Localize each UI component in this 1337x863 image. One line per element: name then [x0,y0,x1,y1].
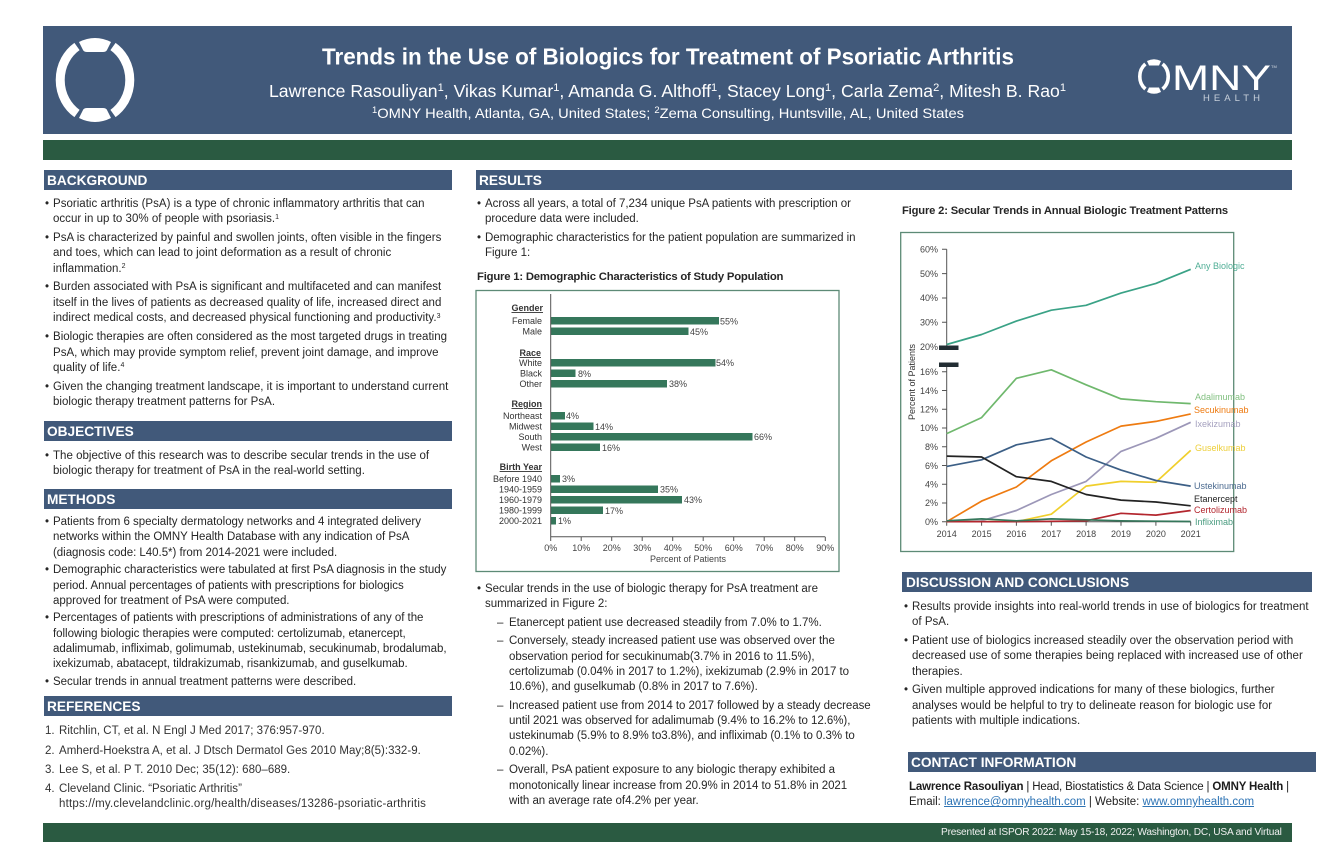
text: background bullets: quality of life.4 [53,362,124,374]
bar chart: demographics: 2000-2021 [499,516,542,526]
authors: , Vikas Kumar [444,81,553,101]
bar chart: demographics: Midwest [509,422,542,432]
bar chart: demographics: 1980-1999 [499,506,542,516]
text: methods bullets: approved for treatment of PsA were computed. [53,595,289,607]
line chart: biologic trends [900,232,1249,552]
line chart: biologic trends: 4% [925,480,938,490]
affiliations: OMNY Health, Atlanta, GA, United States; [377,105,654,121]
bar chart: demographics: 90% [816,543,834,553]
line chart: biologic trends: 2020 [1146,529,1166,539]
text: discussion bullets: patients with multiple indications. [912,715,1080,727]
text: methods bullets: • [45,516,49,528]
line chart: biologic trends: 50% [920,269,938,279]
bar chart: demographics: 45% [690,327,708,337]
text: references list: 1. [45,725,55,737]
bar chart: demographics: 1940-1959 [499,484,542,494]
text: secular trends summary [477,583,871,807]
text: contact details [909,781,1289,808]
line chart: biologic trends: 8% [925,442,938,452]
bar chart: demographics: 8% [578,369,591,379]
bar chart: demographics: 4% [566,411,579,421]
header banner [43,26,1292,134]
text: references list: https://my.clevelandclinic.org/health/diseases/13286-psoriatic-arthritis [59,798,426,810]
bar chart: demographics: 30% [633,543,651,553]
authors [269,81,1066,101]
heading: results: RESULTS [479,173,542,188]
authors: , Stacey Long [717,81,825,101]
bar chart: demographics: Female [512,316,542,326]
affiliations: 1 [372,105,377,115]
text: objectives [45,450,430,477]
heading: discussion and conclusions: DISCUSSION AND CONCLUSIONS [906,575,1129,590]
bar chart: demographics: 20% [603,543,621,553]
text: secular trends summary: observation period for secukinumab(3.7% in 2016 to 11.5%), [509,651,815,663]
text: references list: Lee S, et al. P T. 2010 Dec; 35(12): 680–689. [59,764,290,776]
text: methods bullets: ixekizumab, abatacept, tildrakizumab, risankizumab, and guselkumab. [53,658,408,670]
line chart: biologic trends: Secukinumab [1194,405,1249,415]
heading: contact information: CONTACT INFORMATION [911,755,1076,770]
text: background bullets: and toes, which can lead to joint deformation as a result of chronic [53,247,391,259]
text: results intro: • [477,198,481,210]
footer band [43,823,1292,842]
heading: methods [44,489,452,509]
line chart: biologic trends: Certolizumab [1194,505,1247,515]
text: discussion bullets: analyses would be helpful to try to delineate reason for biologic use for [912,700,1272,712]
text: discussion bullets: of PsA. [912,616,949,628]
text: secular trends summary: Conversely, steady increased patient use was observed over the [509,635,835,647]
text: results intro: Figure 1: [485,247,530,259]
text: secular trends summary: • [477,583,481,595]
line chart: biologic trends: 2019 [1111,529,1131,539]
authors: Lawrence Rasouliyan [269,81,436,101]
heading: methods: METHODS [47,492,115,507]
text: references list: Amherd-Hoekstra A, et al. J Dtsch Dermatol Ges 2010 May;8(5):332-9. [59,745,421,757]
heading: background [44,170,452,190]
bar chart: demographics: South [518,432,542,442]
icon: OMNY Health wordmark: HEALTH [1203,93,1260,104]
authors: 1 [1060,82,1066,94]
line chart: biologic trends: 2021 [1181,529,1201,539]
heading: references [44,696,452,716]
text: discussion bullets: Patient use of biologics increased steadily over the observation period with [912,635,1293,647]
line chart: biologic trends: Infliximab [1195,517,1233,527]
heading: discussion and conclusions [902,572,1312,592]
heading: results [476,170,1292,190]
text: methods bullets: Patients from 6 specialty dermatology networks and 4 integrated delivery [53,516,421,528]
affiliations: Zema Consulting, Huntsville, AL, United States [660,105,964,121]
icon: OMNY Health wordmark: TM [1271,64,1277,69]
text: background bullets: indirect medical costs, and decreased physical functioning and productivity.3 [53,312,440,324]
authors: , Mitesh B. Rao [939,81,1060,101]
text: secular trends summary: Etanercept patient use decreased steadily from 7.0% to 1.7%. [509,617,822,629]
text: background bullets [45,198,448,408]
text: methods bullets: • [45,676,49,688]
text: background bullets: Given the changing treatment landscape, it is important to understand current [53,381,448,393]
bar chart: demographics: 38% [669,379,687,389]
icon: OMNY Health wordmark [1138,59,1277,104]
heading: background: BACKGROUND [47,173,147,188]
text: secular trends summary: Overall, PsA patient exposure to any biologic therapy exhibited a [509,764,835,776]
heading: objectives: OBJECTIVES [47,424,134,439]
text: secular trends summary: Secular trends in the use of biologic therapy for PsA treatment are [485,583,818,595]
bar chart: demographics: Percent of Patients [650,554,727,564]
bar chart: demographics: 80% [786,543,804,553]
text: secular trends summary: – [497,700,503,712]
text: background bullets: • [45,232,49,244]
text: secular trends summary: – [497,764,503,776]
bar chart: demographics: Birth Year [500,462,542,472]
text: secular trends summary: 0.02%). [509,746,548,758]
line chart: biologic trends: 30% [920,318,938,328]
text: background bullets: biologic therapy treatment patterns for PsA. [53,396,275,408]
bar chart: demographics: 66% [754,432,772,442]
text: methods bullets: Secular trends in annual treatment patterns were described. [53,676,356,688]
text: secular trends summary: – [497,635,503,647]
text: secular trends summary: summarized in Figure 2: [485,598,607,610]
text: objectives: The objective of this research was to describe secular trends in the use of [53,450,429,462]
line chart: biologic trends: 6% [925,461,938,471]
line chart: biologic trends: Ustekinumab [1194,481,1247,491]
text: methods bullets: period. Annual percentages of patients with prescriptions for biologics [53,580,404,592]
text: references list: 3. [45,764,55,776]
text: discussion bullets: decreased use of some therapies being replaced with increased use of other [912,650,1303,662]
line chart: biologic trends: 12% [920,404,938,414]
text: results intro [477,198,856,259]
text: contact details: Lawrence Rasouliyan | Head, Biostatistics & Data Science | OMNY Health | [909,781,1289,793]
text: background bullets: itself in the lives of patients as decreased quality of life, increased direct and [53,297,441,309]
line chart: biologic trends: Any Biologic [1195,261,1245,271]
text: discussion bullets [904,601,1309,727]
bar chart: demographics: 35% [660,484,678,494]
icon: OMNY ring logo [56,38,134,122]
authors: , Carla Zema [831,81,933,101]
text: methods bullets: • [45,612,49,624]
text: references list: Ritchlin, CT, et al. N Engl J Med 2017; 376:957-970. [59,725,325,737]
line chart: biologic trends: 2016 [1006,529,1026,539]
bar chart: demographics: Black [520,368,542,378]
bar chart: demographics: Race [519,348,541,358]
line chart: biologic trends: 2014 [937,529,957,539]
line chart: biologic trends: 20% [920,342,938,352]
text: methods bullets [45,516,447,688]
text: background bullets: • [45,198,49,210]
bar chart: demographics: 1960-1979 [499,495,542,505]
bar chart: demographics: White [519,358,542,368]
bar chart: demographics: 54% [716,358,734,368]
line chart: biologic trends: Guselkumab [1195,443,1246,453]
text: secular trends summary: until 2021 was observed for adalimumab (9.4% to 16.2% to 12.6%), [509,715,850,727]
text: methods bullets: adalimumab, infliximab, golimumab, ustekinumab, secukinumab, brodalumab, [53,643,447,655]
bar chart: demographics: Before 1940 [493,474,542,484]
line chart: biologic trends: 14% [920,386,938,396]
bar chart: demographics: 10% [572,543,590,553]
text: secular trends summary: – [497,617,503,629]
text: references list: 2. [45,745,55,757]
heading: references: REFERENCES [47,699,141,714]
bar chart: demographics [475,290,840,572]
text: secular trends summary: certolizumab (0.04% in 2017 to 1.2%), ixekizumab (2.9% in 2017 to [509,666,849,678]
line chart: biologic trends: 0% [925,517,938,527]
bar chart: demographics: 3% [562,474,575,484]
line chart: biologic trends: 2017 [1041,529,1061,539]
heading: contact information [908,752,1316,772]
line chart: biologic trends: Etanercept [1194,494,1238,504]
line chart: biologic trends: 2% [925,498,938,508]
text: discussion bullets: Results provide insights into real-world trends in use of biologics for treatment [912,601,1309,613]
text: background bullets: PsA is characterized by painful and swollen joints, often visible in the fingers [53,232,441,244]
line chart: biologic trends: Percent of Patients [907,343,917,420]
text: methods bullets: Percentages of patients with prescriptions of administrations of any of the [53,612,423,624]
bar chart: demographics: 1% [558,516,571,526]
text: background bullets: inflammation.2 [53,263,126,275]
line chart: biologic trends: 2018 [1076,529,1096,539]
text: secular trends summary: Increased patient use from 2014 to 2017 followed by a steady decrease [509,700,871,712]
bar chart: demographics: West [522,442,542,452]
text: references list [45,725,426,810]
affiliations [372,105,964,121]
text: objectives: • [45,450,49,462]
text: secular trends summary: with an average rate of4.2% per year. [509,795,699,807]
figure 2 title: Figure 2: Secular Trends in Annual Biologic Treatment Patterns [902,204,1228,216]
bar chart: demographics: 60% [725,543,743,553]
text: discussion bullets: • [904,635,908,647]
text: methods bullets: (diagnosis code: L40.5*) from 2014-2021 were included. [53,547,337,559]
text: background bullets: • [45,381,49,393]
text: background bullets: PsA, which may provide symptom relief, prevent joint damage, and improve [53,347,439,359]
text: results intro: Across all years, a total of 7,234 unique PsA patients with prescription or [485,198,851,210]
authors: 2 [933,82,939,94]
line chart: biologic trends: Adalimumab [1195,392,1245,402]
text: secular trends summary: monotonically linear increase from 20.9% in 2014 to 51.8% in 2021 [509,780,847,792]
text: results intro: procedure data were included. [485,213,639,225]
affiliations: 2 [654,105,660,115]
text: discussion bullets: therapies. [912,666,963,678]
bar chart: demographics: 70% [755,543,773,553]
authors: 1 [553,82,559,94]
bar chart: demographics: Other [519,379,542,389]
text: background bullets: Biologic therapies are often considered as the most targeted drugs in treating [53,331,447,343]
authors: , Amanda G. Althoff [559,81,711,101]
text: background bullets: occur in up to 30% of people with psoriasis.1 [53,213,279,225]
text: references list: 4. [45,783,55,795]
bar chart: demographics: Gender [511,303,543,313]
green band [43,140,1292,160]
text: results intro: Demographic characteristics for the patient population are summarized in [485,232,856,244]
bar chart: demographics: 17% [605,506,623,516]
authors: 1 [438,82,444,94]
bar chart: demographics: 43% [684,495,702,505]
bar chart: demographics: 14% [595,422,613,432]
line chart: biologic trends: 2015 [972,529,992,539]
text: background bullets: Burden associated with PsA is significant and multifaceted and can manifest [53,281,441,293]
line chart: biologic trends: Ixekizumab [1195,419,1241,429]
bar chart: demographics: Region [512,399,542,409]
text: secular trends summary: ustekinumab (5.9% to 8.9% to3.8%), and infliximab (0.1% to 0.3% to [509,730,855,742]
text: objectives: biologic therapy for treatment of PsA in the real-world setting. [53,465,365,477]
text: references list: Cleveland Clinic. “Psoriatic Arthritis” [59,783,242,795]
bar chart: demographics: Male [522,326,542,336]
text: secular trends summary: 10.6%), and guselkumab (0.8% in 2017 to 7.6%). [509,681,758,693]
authors: 1 [825,82,831,94]
text: background bullets: • [45,281,49,293]
text: methods bullets: networks within the OMNY Health Database with any indication of PsA [53,531,409,543]
figure 1 title: Figure 1: Demographic Characteristics of Study Population [477,270,783,282]
title: Trends in the Use of Biologics for Treatment of Psoriatic Arthritis [322,44,1014,70]
line chart: biologic trends: 40% [920,293,938,303]
bar chart: demographics: 50% [694,543,712,553]
bar chart: demographics: 55% [720,316,738,326]
footer text: Presented at ISPOR 2022: May 15-18, 2022; Washington, DC, USA and Virtual [941,827,1282,838]
bar chart: demographics: Northeast [503,411,542,421]
text: background bullets: Psoriatic arthritis (PsA) is a type of chronic inflammatory arthritis that can [53,198,425,210]
text: discussion bullets: Given multiple approved indications for many of these biologics, further [912,684,1275,696]
text: discussion bullets: • [904,684,908,696]
text: methods bullets: • [45,564,49,576]
text: discussion bullets: • [904,601,908,613]
bar chart: demographics: 16% [602,443,620,453]
line chart: biologic trends: 60% [920,244,938,254]
bar chart: demographics: 0% [544,543,557,553]
text: methods bullets: Demographic characteristics were tabulated at first PsA diagnosis in the study [53,564,446,576]
text: methods bullets: following biologic therapies were computed: certolizumab, etanercept, [53,628,406,640]
heading: objectives [44,421,452,441]
text: contact details: Email: lawrence@omnyhealth.com | Website: www.omnyhealth.com [909,796,1254,808]
line chart: biologic trends: 16% [920,367,938,377]
icon: OMNY Health wordmark: MNY [1172,59,1271,98]
bar chart: demographics: 40% [664,543,682,553]
text: background bullets: • [45,331,49,343]
line chart: biologic trends: 10% [920,423,938,433]
text: results intro: • [477,232,481,244]
authors: 1 [711,82,717,94]
